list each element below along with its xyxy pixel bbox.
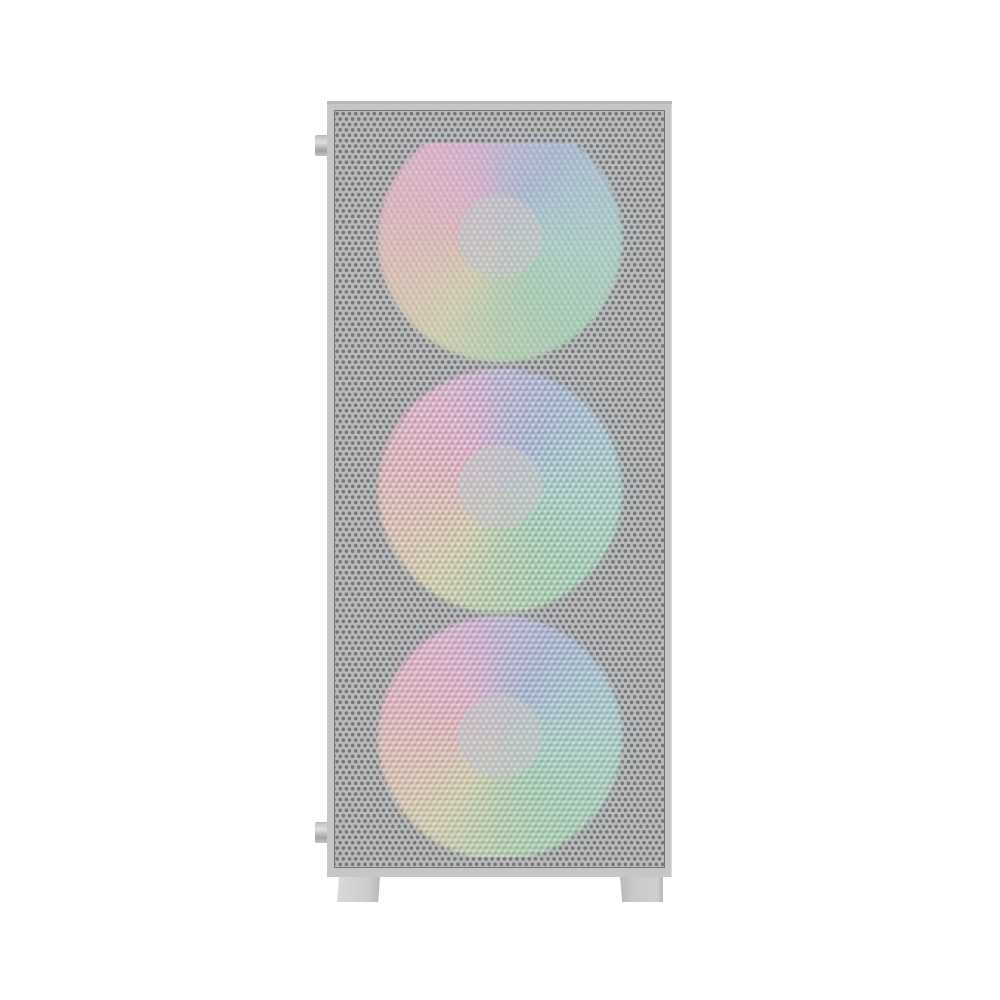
fan hub: top (458, 195, 542, 279)
mesh panel (334, 110, 665, 868)
fan: top (374, 143, 625, 364)
fan: bottom (374, 614, 625, 857)
fan hub: bottom (458, 695, 542, 779)
hinge: lower (315, 822, 328, 843)
case front frame (327, 101, 672, 877)
hinge: upper (315, 135, 328, 156)
fan mesh highlights: middle (378, 369, 622, 613)
foot: left (337, 876, 380, 902)
fan mesh highlights: top (378, 144, 622, 362)
foot: right (620, 876, 663, 902)
fan: middle (374, 366, 625, 616)
fan hub: middle (458, 445, 542, 529)
fan mesh highlights: bottom (378, 616, 622, 857)
